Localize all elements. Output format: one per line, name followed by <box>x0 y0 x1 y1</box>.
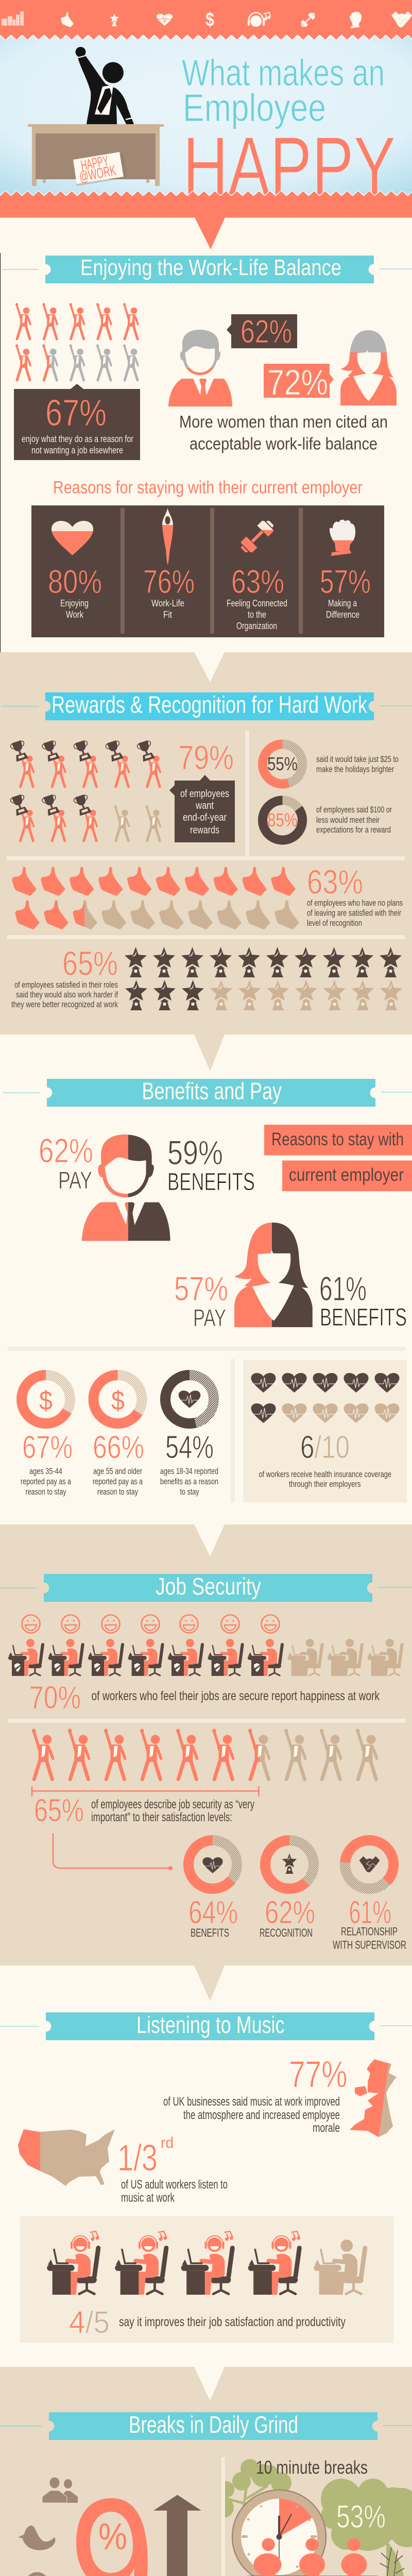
stat: 53 percent: 53% <box>336 2499 386 2535</box>
stat: work-life fit: 76% <box>143 563 195 600</box>
stat: UK 77 percent: of UK businesses said music at work improved <box>163 2095 340 2109</box>
seated people <box>253 2538 367 2576</box>
panel: music at desk <box>20 2216 393 2343</box>
donut: ages 35-44: reported pay as a <box>21 1477 71 1486</box>
plant <box>380 2548 404 2576</box>
donut: age 55 and older <box>93 1375 144 1497</box>
caption: work-life balance <box>179 412 388 453</box>
panel: reasons for staying <box>31 505 384 637</box>
woman pay and benefits <box>174 1223 407 1331</box>
icon: fist <box>330 520 355 556</box>
pictogram: thumbs up <box>12 867 299 929</box>
icon: bird <box>18 2526 55 2550</box>
donut: recognition 62 percent: RECOGNITION <box>260 1926 313 1939</box>
bracket <box>32 1786 259 1797</box>
stat: feeling connected: to the <box>248 609 266 620</box>
icon: swimmer <box>162 508 173 565</box>
section heading: listening to music <box>0 2011 412 2040</box>
icon: man bust split <box>82 1134 170 1241</box>
gender comparison: men and women <box>168 314 397 453</box>
pictogram: workers with headphones <box>47 2231 300 2295</box>
stat: 4 of 5 <box>69 2305 346 2340</box>
connector arrow <box>53 1833 173 1870</box>
stat: women benefits: 61% <box>319 1269 367 1308</box>
stat: making a difference: 57% <box>320 563 371 600</box>
callout: 67 percent: 67% <box>45 393 107 434</box>
donut: age 55 and older: 66% <box>93 1430 144 1465</box>
donut: ages 35-44: ages 35-44 <box>29 1466 62 1476</box>
hero figure at desk <box>28 47 164 186</box>
donut: 55 percent <box>263 744 302 784</box>
panel: health insurance <box>243 1360 407 1502</box>
donut: age 55 and older: age 55 and older <box>93 1466 142 1476</box>
section heading: listening to music: Listening to Music <box>136 2011 284 2038</box>
stat: men pay: PAY <box>58 1166 92 1194</box>
stat: 65 percent job security: important” to their satisfaction levels: <box>91 1810 232 1824</box>
stat: men pay <box>39 1131 93 1194</box>
donut: ages 18-34: to stay <box>180 1487 199 1497</box>
donut: ages 18-34: ages 18-34 reported <box>160 1466 218 1476</box>
pictogram: standing people <box>32 1729 379 1780</box>
callout: end-of-year rewards: of employees <box>180 788 229 800</box>
stat: 4 of 5: say it improves their job satisfaction and productivity <box>119 2315 346 2329</box>
icon: man bust <box>168 330 232 406</box>
icon: magnifier <box>27 2574 47 2576</box>
stat: 65 percent job security: of employees describe job security as “very <box>91 1798 254 1811</box>
stat: work-life fit <box>143 563 195 620</box>
donut: ages 35-44 <box>21 1375 73 1497</box>
sign: happy at work <box>73 143 127 186</box>
stat: feeling connected <box>227 563 287 631</box>
callout: end-of-year rewards: end-of-year <box>183 812 227 823</box>
stat: 63 percent recognition: 63% <box>307 863 363 901</box>
stat: 4 of 5: 4/5 <box>69 2305 110 2340</box>
text: health coverage: through their employers <box>289 1479 360 1489</box>
section heading: job security: Job Security <box>156 1573 261 1600</box>
icon: people <box>42 2477 78 2503</box>
header icon row: $ <box>205 9 214 30</box>
section: breaks in daily grind <box>0 2367 412 2576</box>
stat: men benefits: 59% <box>167 1133 223 1172</box>
stat: work-life fit: Work-Life <box>151 598 184 608</box>
stat: women pay: 57% <box>174 1269 228 1308</box>
icon: woman bust <box>340 330 397 405</box>
stat: 65 percent job security <box>34 1793 254 1828</box>
icon: woman bust split <box>234 1223 313 1327</box>
pictogram: star trophies <box>125 947 402 1010</box>
stat: making a difference: Making a <box>328 598 357 608</box>
stat: women benefits <box>319 1269 407 1331</box>
stat: UK 77 percent: the atmosphere and increased employee <box>183 2108 340 2122</box>
callout: 67 percent: not wanting a job elsewhere <box>31 445 123 455</box>
section heading: job security <box>0 1573 412 1602</box>
donut: supervisor 61 percent: 61% <box>349 1895 391 1930</box>
stat: enjoying work: Enjoying <box>60 598 89 608</box>
stat: enjoying work: 80% <box>48 563 102 600</box>
stat: 79 percent: 79% <box>178 738 234 776</box>
stat: feeling connected: 63% <box>231 563 284 600</box>
stat: 65 percent job security: 65% <box>34 1793 84 1828</box>
text: health coverage <box>259 1469 391 1489</box>
section heading: breaks <box>0 2411 412 2440</box>
donut: ages 35-44: $ <box>39 1386 53 1416</box>
text: ten minute breaks heading: 10 minute breaks <box>256 2456 368 2478</box>
donut: benefits 64 percent: 64% <box>188 1895 238 1930</box>
stat: one third of US workers <box>117 2134 228 2205</box>
donut: recognition 62 percent <box>260 1840 315 1939</box>
donut: benefits 64 percent: BENEFITS <box>191 1926 229 1939</box>
stat: women pay <box>174 1269 228 1331</box>
caption: work-life balance: acceptable work-life balance <box>190 434 377 453</box>
section: rewards and recognition <box>0 652 412 1035</box>
stat: UK 77 percent: morale <box>313 2121 340 2135</box>
donut: age 55 and older: reported pay as a <box>93 1477 143 1486</box>
stat: 70 percent: 70% <box>29 1680 81 1716</box>
stat: men benefits: BENEFITS <box>167 1168 255 1196</box>
text: 100 dollars: less would meet their <box>316 815 380 825</box>
stat: making a difference <box>320 563 371 620</box>
callout: 67 percent: enjoy what they do as a reason for <box>22 434 133 444</box>
title <box>182 53 396 213</box>
stat: enjoying work <box>48 563 102 620</box>
stat: 65 percent work harder: of employees satisfied in their roles <box>14 980 118 990</box>
text: 25 dollars <box>316 754 399 774</box>
donut: recognition 62 percent: 62% <box>265 1895 315 1930</box>
section heading: benefits and pay <box>3 1078 412 1107</box>
donut: ages 18-34 <box>160 1375 218 1497</box>
stat: one third of US workers: 1/3 <box>117 2138 158 2179</box>
section heading: work-life balance <box>2 255 412 283</box>
heading: reasons for staying: Reasons for staying with their current employer <box>53 478 363 498</box>
stat: men benefits <box>167 1133 255 1196</box>
callout: women 72 percent: 72% <box>267 362 328 402</box>
stat: 70 percent <box>29 1680 380 1716</box>
donut: 85 percent: 85% <box>267 809 298 831</box>
desk <box>28 124 164 186</box>
section: job security <box>0 1524 412 1965</box>
pictogram: 67 percent people <box>15 303 139 380</box>
icon: heart <box>52 521 93 555</box>
section heading: work-life balance: Enjoying the Work-Life Balance <box>80 255 341 280</box>
pictogram: smiling faces <box>22 1615 279 1633</box>
stat: making a difference: Difference <box>326 609 359 620</box>
callout: end-of-year rewards <box>169 775 235 842</box>
stat: UK 77 percent <box>163 2054 347 2135</box>
callout: men 62 percent: 62% <box>241 314 292 350</box>
callout: end-of-year rewards: rewards <box>190 824 219 836</box>
man pay and benefits <box>39 1131 255 1241</box>
stat: 63 percent recognition <box>307 863 403 928</box>
stat: one third of US workers: music at work <box>121 2191 175 2205</box>
donut: ages 35-44: 67% <box>22 1430 73 1465</box>
donut: ages 18-34: 54% <box>165 1430 214 1465</box>
map: UK <box>350 2059 397 2137</box>
pictogram: trophy people <box>10 740 161 841</box>
donut: age 55 and older: reason to stay <box>97 1487 138 1497</box>
donut: ages 18-34: benefits as a reason <box>160 1477 218 1486</box>
icon: dumbbell <box>241 521 273 552</box>
stat: 65 percent work harder: they were better recognized at work <box>11 999 118 1009</box>
stat: 65 percent work harder: said they would also work harder if <box>16 990 118 999</box>
stat: 6 of 10: 6/10 <box>300 1430 350 1465</box>
text: 100 dollars <box>316 805 392 835</box>
callout: end-of-year rewards: want <box>195 800 214 811</box>
title: Employee <box>183 86 326 129</box>
callout: 67 percent <box>14 384 140 460</box>
text: 100 dollars: expectations for a reward <box>316 825 391 835</box>
donut: 85 percent <box>263 801 302 840</box>
stat: enjoying work: Work <box>66 609 84 620</box>
header banner <box>0 0 412 196</box>
stat: work-life fit: Fit <box>163 609 172 620</box>
caption: work-life balance: More women than men cited an <box>179 412 388 431</box>
donut: supervisor 61 percent <box>333 1838 406 1952</box>
stat: feeling connected: Feeling Connected <box>227 598 287 608</box>
header icon row <box>2 9 412 30</box>
stat: 63 percent recognition: level of recognition <box>307 918 362 928</box>
illustration: outdoor break <box>213 2459 412 2576</box>
big nine percent: % <box>98 2516 127 2557</box>
stat: men pay: 62% <box>39 1131 93 1170</box>
section heading: benefits and pay: Benefits and Pay <box>142 1078 282 1105</box>
donut: age 55 and older: $ <box>111 1386 125 1416</box>
stat: feeling connected: Organization <box>236 621 277 631</box>
trees <box>213 2459 412 2576</box>
stat: 65 percent work harder: 65% <box>62 944 118 982</box>
stat: UK 77 percent: 77% <box>289 2054 347 2095</box>
stat: one third of US workers: rd <box>161 2134 174 2151</box>
pictogram: desk workers <box>8 1639 402 1676</box>
donut: benefits 64 percent <box>188 1840 238 1939</box>
callout: reasons to stay with current employer <box>264 1125 412 1191</box>
map: USA <box>18 2129 115 2186</box>
pictogram: hearts <box>249 1373 401 1423</box>
stat: one third of US workers: of US adult workers listen to <box>121 2178 228 2192</box>
clock <box>232 2490 326 2576</box>
arrow: up <box>153 2495 201 2576</box>
section heading: breaks: Breaks in Daily Grind <box>129 2411 298 2438</box>
sign: happy at work: HAPPY <box>79 152 110 174</box>
stat: women pay: PAY <box>193 1304 226 1331</box>
stat: 65 percent work harder <box>11 944 118 1009</box>
sign: happy at work: @WORK <box>78 162 117 185</box>
donut: ages 35-44: reason to stay <box>26 1487 66 1497</box>
donut: 55 percent: 55% <box>267 753 298 774</box>
